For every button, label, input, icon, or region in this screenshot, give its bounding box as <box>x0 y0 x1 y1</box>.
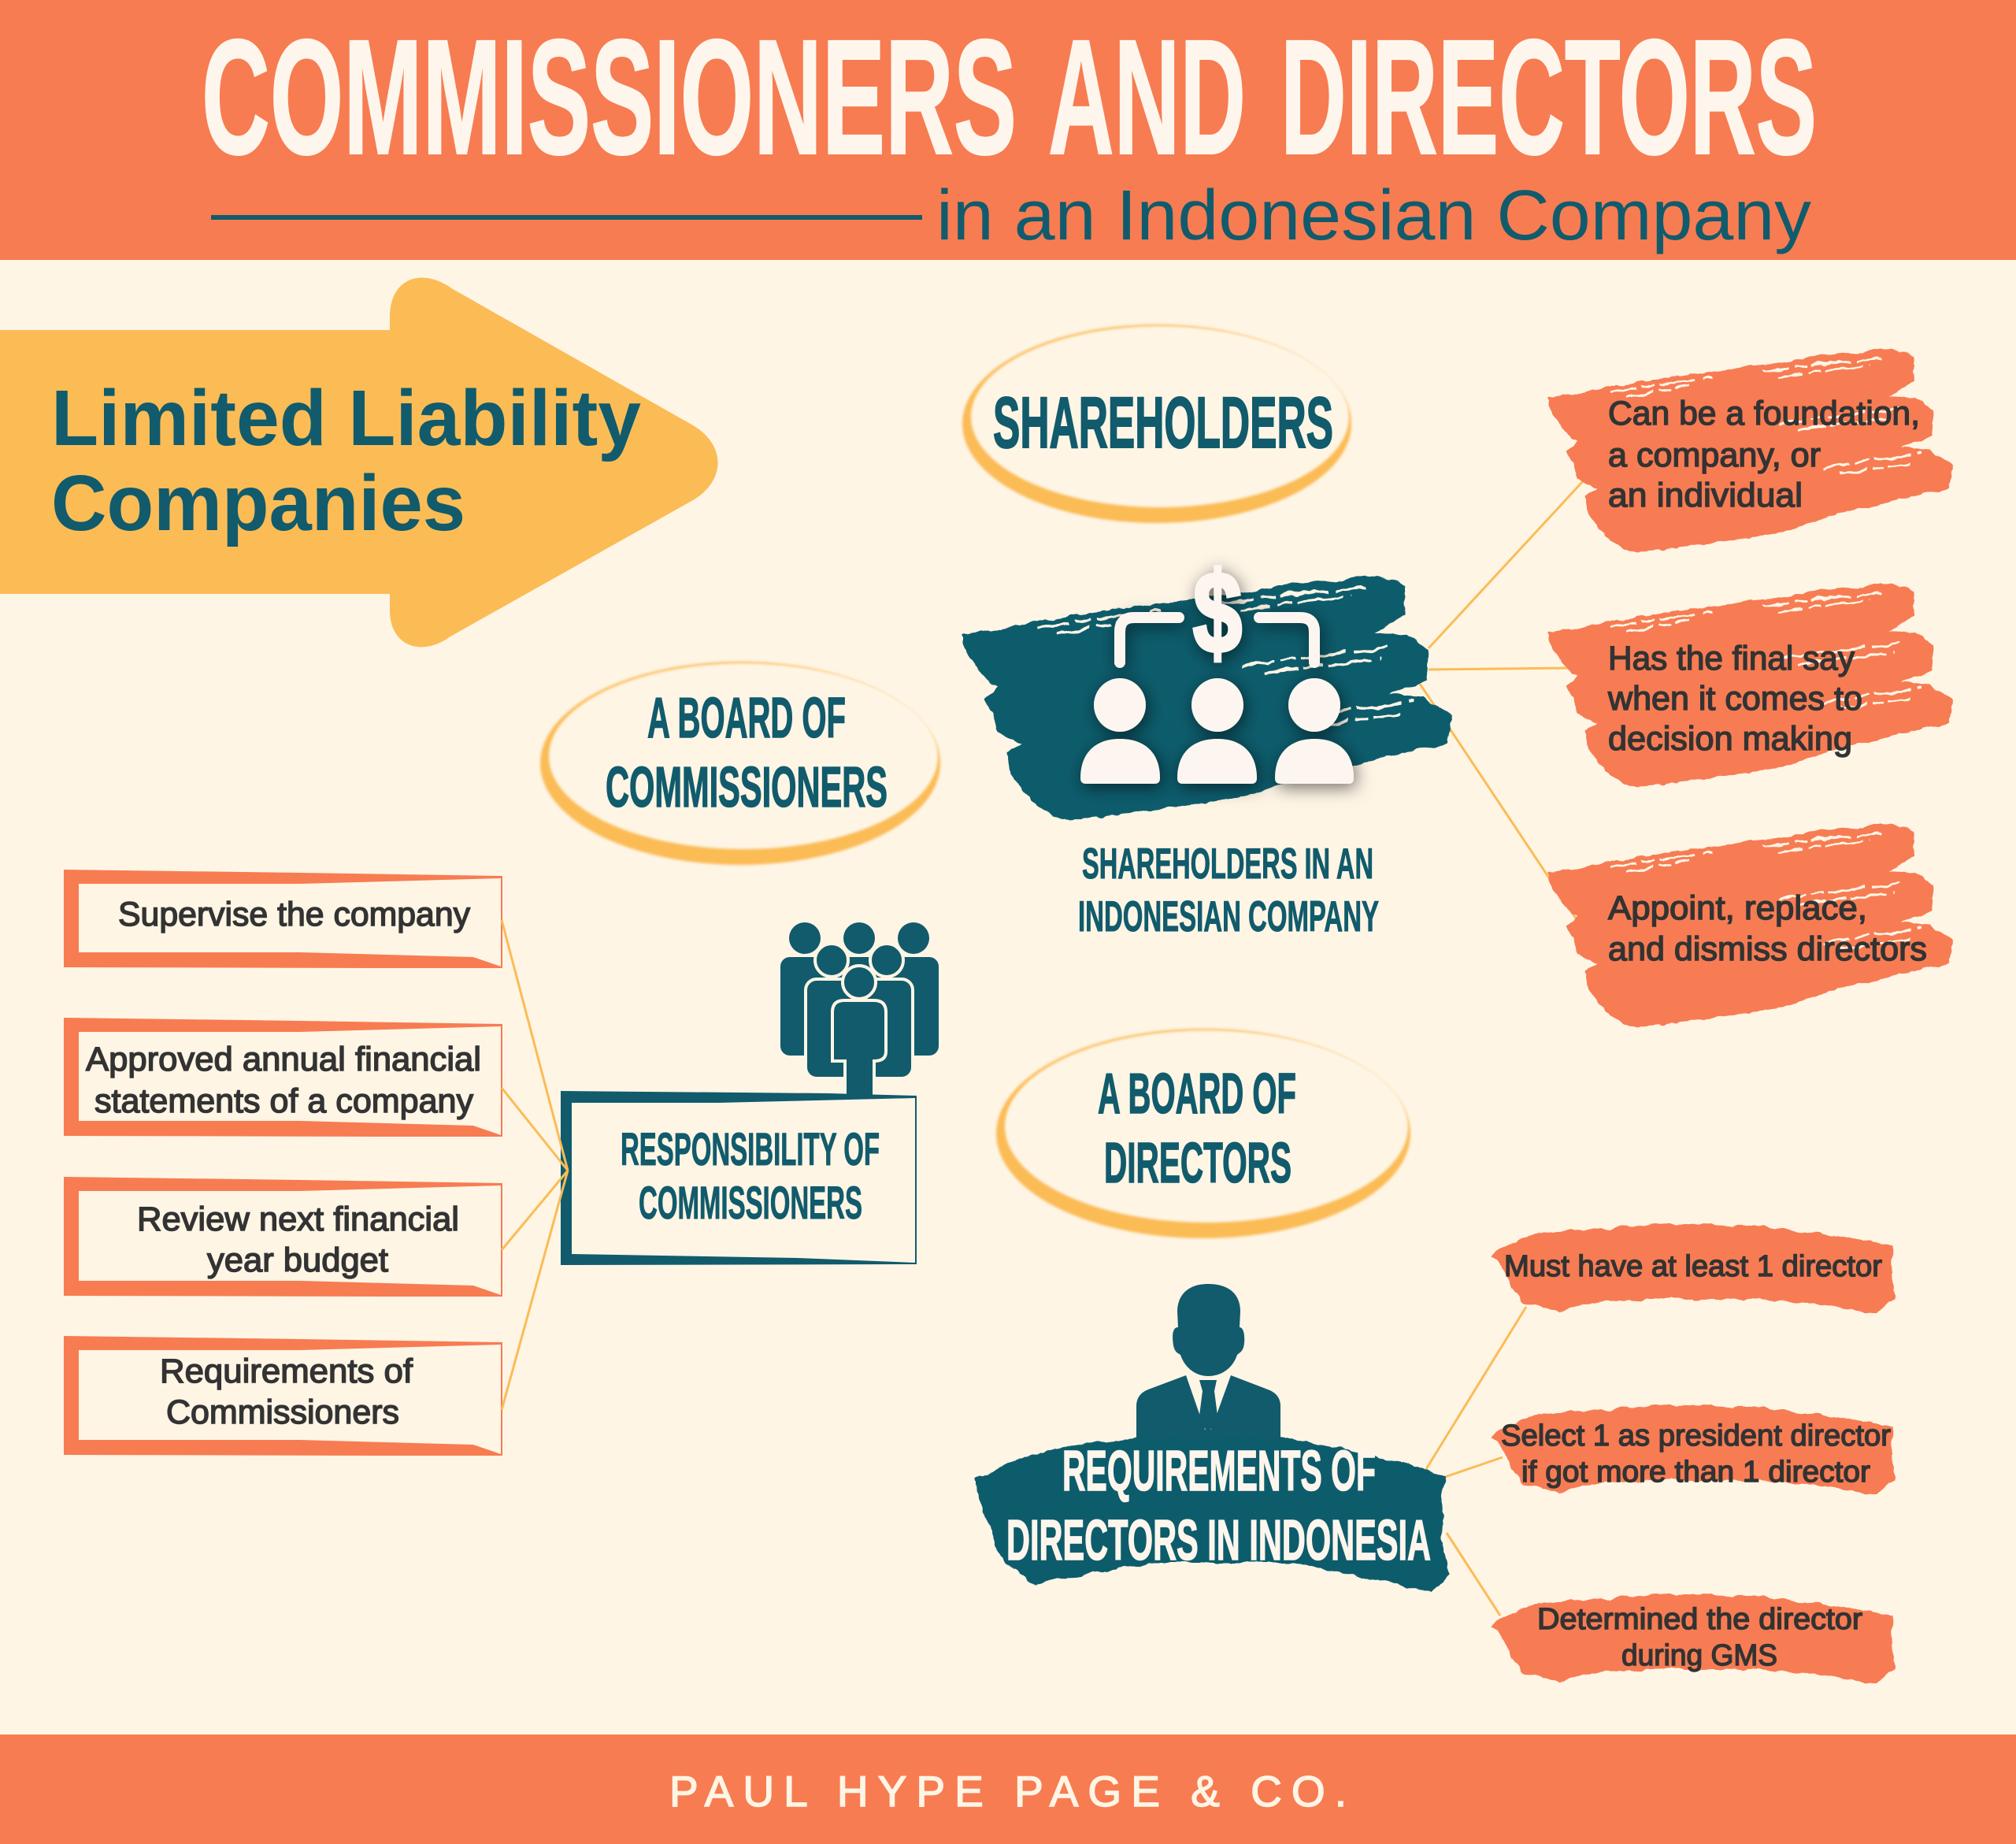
oval: board of commissioners <box>540 662 940 865</box>
box: requirements <box>64 1336 502 1456</box>
caption: shareholders in an Indonesian company <box>1078 839 1379 941</box>
oval: shareholders <box>962 325 1351 523</box>
footer text: PAUL HYPE PAGE & CO. <box>669 1767 1347 1816</box>
box: review budget: Review next financial <box>137 1200 459 1238</box>
brush callout: foundation: an individual <box>1608 477 1803 514</box>
oval label: A BOARD OF <box>1098 1063 1296 1126</box>
icon: shareholders with dollar <box>1080 548 1354 784</box>
brush callout: final say <box>1548 582 1953 788</box>
brush callout: final say: when it comes to <box>1607 680 1862 718</box>
arrow label: Limited Liability <box>51 374 641 462</box>
box: requirements: Requirements of <box>160 1352 413 1390</box>
brush callout: appoint directors: and dismiss directors <box>1608 930 1927 968</box>
brush callout: appoint directors <box>1548 822 1953 1028</box>
brush callout: appoint directors: Appoint, replace, <box>1608 889 1867 927</box>
connector lines: shareholders <box>1418 481 1583 922</box>
box: requirements: Commissioners <box>166 1393 399 1431</box>
brush callout: president director <box>1491 1404 1896 1495</box>
brush callout: foundation: Can be a foundation, <box>1608 395 1920 432</box>
arrow label <box>51 374 641 547</box>
brush callout: at least 1 director: Must have at least 1 director <box>1504 1250 1882 1283</box>
brush callout: final say: decision making <box>1608 720 1852 758</box>
brush callout: final say: Has the final say <box>1608 640 1855 677</box>
box: review budget <box>64 1177 502 1297</box>
brush panel: requirements of directors <box>976 1438 1450 1593</box>
brush callout: determined during GMS: during GMS <box>1621 1639 1777 1672</box>
panel: responsibility of commissioners: RESPONSIBILITY OF <box>621 1124 880 1175</box>
brush callout: determined during GMS: Determined the director <box>1537 1603 1862 1636</box>
oval: board of directors <box>996 1029 1410 1238</box>
caption: shareholders in an Indonesian company: INDONESIAN COMPANY <box>1078 892 1379 941</box>
oval label: A BOARD OF <box>647 687 846 750</box>
brush callout: president director: if got more than 1 director <box>1521 1456 1870 1489</box>
box: supervise: Supervise the company <box>118 896 470 933</box>
box: approved statements: Approved annual financial <box>86 1041 481 1078</box>
subtitle: in an Indonesian Company <box>936 176 1811 255</box>
title: AND <box>1048 6 1246 189</box>
icon: director <box>1136 1284 1280 1445</box>
caption: shareholders in an Indonesian company: SHAREHOLDERS IN AN <box>1082 839 1373 888</box>
brush callout: determined during GMS <box>1491 1594 1896 1684</box>
brush callout: foundation <box>1548 347 1953 553</box>
subtitle rule <box>211 215 922 220</box>
brush panel: requirements of directors: DIRECTORS IN INDONESIA <box>1006 1509 1431 1572</box>
panel: responsibility of commissioners: COMMISSIONERS <box>639 1178 862 1229</box>
oval: board of directors: DIRECTORS <box>1104 1132 1292 1195</box>
box: approved statements <box>64 1018 502 1137</box>
arrow: Limited Liability Companies <box>0 278 718 647</box>
brush callout: president director: Select 1 as president director <box>1501 1419 1891 1453</box>
brush callout: at least 1 director <box>1491 1223 1896 1314</box>
title: COMMISSIONERS <box>202 6 1017 189</box>
brush callout: foundation: a company, or <box>1608 436 1821 474</box>
header band <box>0 0 2016 260</box>
oval: board of commissioners: COMMISSIONERS <box>606 756 888 819</box>
banner label: REQUIREMENTS OF <box>1062 1440 1376 1503</box>
box: supervise <box>64 870 502 968</box>
oval label: SHAREHOLDERS <box>993 383 1333 463</box>
box: approved statements: statements of a company <box>94 1082 473 1120</box>
icon: group of commissioners <box>780 922 939 1100</box>
footer <box>0 1735 2016 1844</box>
connector lines: commissioners <box>502 920 568 1410</box>
connector lines: directors <box>1426 1307 1526 1616</box>
panel: responsibility of commissioners <box>561 1091 917 1265</box>
icon: shareholders with dollar: $ <box>1193 548 1242 677</box>
brush panel: shareholders icon <box>962 548 1452 821</box>
box: review budget: year budget <box>207 1241 388 1279</box>
arrow label: Companies <box>51 459 465 547</box>
